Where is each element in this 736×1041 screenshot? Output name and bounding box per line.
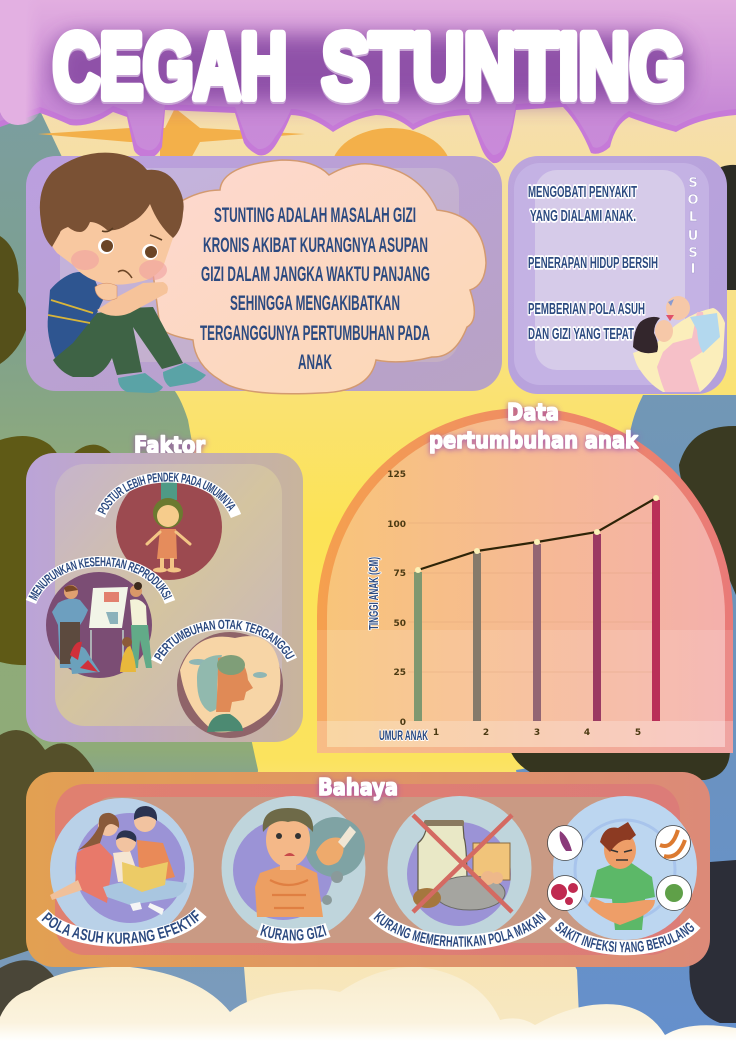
definition text: ANAK [298,351,332,374]
y axis labels: 75 [393,569,406,579]
grid lines [408,523,652,672]
factor: reproductive health [26,556,175,678]
danger: diet: KURANG MEMERHATIKAN POLA MAKAN [374,911,546,947]
factor: brain growth: PERTUMBUHAN OTAK TERGANGGU [154,620,295,662]
solusi list: DAN GIZI YANG TEPAT [528,326,634,343]
purple drip header [0,0,736,163]
definition text: TERGANGGUNYA PERTUMBUHAN PADA [200,322,430,345]
danger: malnutrition [222,796,366,944]
heading: faktor: Faktor [134,433,206,459]
title: CEGAH [53,16,287,118]
panel: solusi [508,156,727,394]
panel: growth chart [317,408,733,753]
icon: sun [331,128,451,212]
solusi list: PEMBERIAN POLA ASUH [528,301,645,318]
line series [415,495,659,573]
vertical heading: solusi: S [688,246,698,261]
x axis labels: 5 [635,728,641,738]
panel: faktor [26,453,303,742]
danger: infection: SAKIT INFEKSI YANG BERULANG [555,922,694,952]
definition text: GIZI DALAM JANGKA WAKTU PANJANG [201,263,430,286]
cloud callout [150,160,486,394]
vertical heading: solusi: L [689,210,697,225]
heading: data pertumbuhan anak [429,400,639,454]
y axis labels [387,470,406,728]
vertical heading: solusi [687,176,699,277]
solusi list: YANG DIALAMI ANAK. [530,208,636,225]
y axis labels: 0 [400,718,406,728]
x axis labels: 3 [534,728,540,738]
definition text: STUNTING ADALAH MASALAH GIZI [214,204,416,227]
definition text: KRONIS AKIBAT KURANGNYA ASUPAN [203,234,428,257]
axis title: tinggi anak: TINGGI ANAK (CM) [367,557,381,630]
vertical heading: solusi: O [687,193,699,208]
axis title: umur anak: UMUR ANAK [379,728,428,743]
danger: parenting: POLA ASUH KURANG EFEKTIF [42,910,199,944]
solusi list: MENGOBATI PENYAKIT [528,184,637,201]
heading: data pertumbuhan anak: pertumbuhan anak [429,428,639,454]
y axis labels: 25 [393,668,406,678]
factor: posture: POSTUR LEBIH PENDEK PADA UMUMNYA [98,472,236,515]
illustration: sad boy [40,153,206,393]
x axis labels: 4 [584,728,590,738]
factor: reproductive health: MENURUNKAN KESEHATAN REPRODUKSI [28,557,172,601]
y axis labels: 50 [393,619,406,629]
title [53,16,685,120]
bars [414,500,660,721]
clouds [0,967,736,1041]
danger: parenting [36,798,207,947]
vertical heading: solusi: I [691,262,695,277]
y axis labels: 100 [387,520,406,530]
solusi list [528,184,658,343]
icon: orange plane shape [38,108,305,160]
panel: definition [26,153,502,394]
x axis labels: 1 [433,728,439,738]
x axis labels: 2 [483,728,489,738]
danger: infection [547,796,700,956]
panel: bahaya [26,772,710,967]
factor: brain growth [151,618,297,738]
x axis labels [433,728,641,738]
danger: diet [368,796,552,950]
definition text [200,204,430,374]
definition text: SEHINGGA MENGAKIBATKAN [230,292,400,315]
title: CEGAH [53,18,287,120]
heading: bahaya: Bahaya [318,775,398,801]
illustration: mother and baby [633,296,725,392]
vertical heading: solusi: U [688,229,698,244]
heading: data pertumbuhan anak: Data [507,400,559,426]
factor: posture [95,472,241,580]
danger: malnutrition: KURANG GIZI [260,924,327,940]
y axis labels: 125 [387,470,406,480]
vertical heading: solusi: S [688,176,698,191]
